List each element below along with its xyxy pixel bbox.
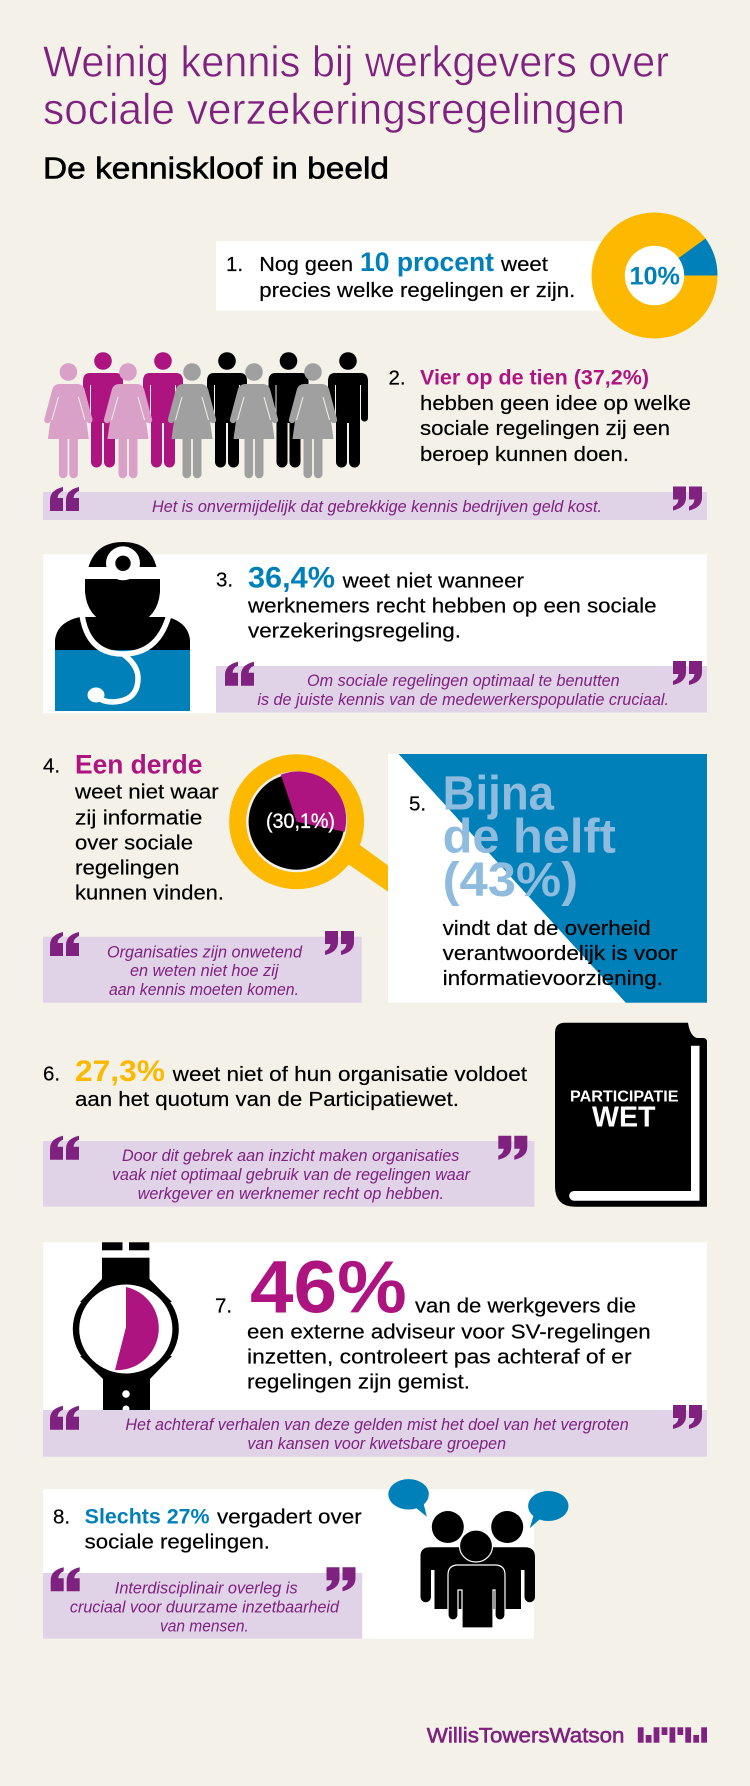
text: item 2: beroep kunnen doen. xyxy=(420,443,629,466)
white background xyxy=(43,1242,707,1410)
icon: opening quote xyxy=(51,1567,80,1591)
text: item 2: Vier op de tien (37,2%) xyxy=(420,366,649,390)
text: item 4: weet niet waar xyxy=(74,780,219,803)
subtitle: De kenniskloof in beeld xyxy=(43,150,389,185)
text: item 2 xyxy=(388,366,691,466)
text: item 6: weet niet of hun organisatie voldoet xyxy=(172,1063,527,1086)
quote text: Interdisciplinair overleg is xyxy=(115,1579,298,1597)
panel: item 2 xyxy=(43,352,707,520)
title: Weinig kennis bij werkgevers over xyxy=(43,38,669,86)
text: item 7: 7. xyxy=(215,1295,232,1318)
icon: book Participatiewet: PARTICIPATIE xyxy=(570,1089,679,1106)
text: item 4: regelingen xyxy=(75,856,179,879)
white text box xyxy=(216,241,606,311)
quote text xyxy=(125,1416,629,1453)
quote text: Het is onvermijdelijk dat gebrekkige kennis bedrijven geld kost. xyxy=(152,498,602,516)
text: item 7: een externe adviseur voor SV-regelingen xyxy=(247,1320,651,1343)
icon: closing quote xyxy=(673,661,702,685)
panel: item 3 xyxy=(43,542,707,713)
icon: opening quote xyxy=(50,1406,79,1430)
quote text xyxy=(257,672,669,709)
donut chart 10 percent: 10% xyxy=(630,262,680,290)
panel: item 7 xyxy=(43,1242,707,1457)
text: item 5: verantwoordelijk is voor xyxy=(443,942,678,965)
icon: magnifying glass with pie: (30,1%) xyxy=(266,810,335,833)
text: item 1: precies welke regelingen er zijn. xyxy=(259,279,575,302)
donut chart 10 percent xyxy=(592,212,718,338)
icon: closing quote xyxy=(673,1405,702,1429)
text: item 5: Bijna xyxy=(443,767,554,820)
icon: opening quote xyxy=(50,932,79,956)
quote text: Het achteraf verhalen van deze gelden mist het doel van het vergroten xyxy=(125,1416,629,1434)
text: item 2: 2. xyxy=(388,366,406,390)
quote text: Door dit gebrek aan inzicht maken organisaties xyxy=(122,1147,459,1165)
text: item 6: 6. xyxy=(43,1063,60,1086)
text: item 4: zij informatie xyxy=(75,806,202,829)
text: item 4: 4. xyxy=(43,755,60,778)
text: item 3 xyxy=(216,562,656,643)
quote text: en weten niet hoe zij xyxy=(130,962,280,980)
text: item 2: sociale regelingen zij een xyxy=(420,417,670,440)
text: item 5: (43%) xyxy=(443,854,578,907)
text: item 7: 46% xyxy=(250,1246,407,1329)
icon: watch with pie xyxy=(73,1242,179,1412)
text: item 3: 36,4% xyxy=(248,562,335,595)
text: item 5 xyxy=(409,767,678,990)
icon: book Participatiewet: WET xyxy=(592,1102,656,1134)
white background xyxy=(388,754,707,1003)
text: item 3: verzekeringsregeling. xyxy=(248,620,461,643)
text: item 8: vergadert over xyxy=(217,1505,362,1528)
text: item 6 xyxy=(43,1055,527,1111)
text: item 5: 5. xyxy=(409,793,426,816)
text: item 8: sociale regelingen. xyxy=(85,1531,270,1554)
quote bar: item 7 xyxy=(43,1405,707,1457)
text: item 7: van de werkgevers die xyxy=(415,1295,636,1318)
text: item 1: weet xyxy=(500,253,548,276)
text: item 4: kunnen vinden. xyxy=(75,881,224,904)
text: item 1: Nog geen xyxy=(259,253,353,276)
quote text xyxy=(70,1579,340,1635)
text: item 1: 1. xyxy=(226,253,243,276)
title xyxy=(43,38,669,134)
text: item 7: regelingen zijn gemist. xyxy=(247,1370,470,1393)
white background xyxy=(43,554,707,713)
panel: item 1 xyxy=(216,212,718,338)
text: item 5: de helft xyxy=(443,811,616,864)
panel: item 6 xyxy=(43,1023,707,1207)
icon: doctor with stethoscope xyxy=(55,542,190,711)
text: item 3: werknemers recht hebben op een sociale xyxy=(247,595,656,618)
text: item 8: 8. xyxy=(53,1505,70,1528)
icon: people talking with speech bubbles xyxy=(388,1479,568,1628)
text: item 1 xyxy=(226,247,575,302)
text: item 4: over sociale xyxy=(75,831,193,854)
text: item 1: 10 procent xyxy=(360,247,494,277)
quote text: is de juiste kennis van de medewerkerspopulatie cruciaal. xyxy=(257,691,669,709)
quote bar: item 4 xyxy=(43,931,362,1003)
text: item 7: inzetten, controleert pas achteraf of er xyxy=(247,1345,632,1368)
quote bar: item 8 xyxy=(43,1567,362,1639)
icon: closing quote xyxy=(325,931,354,955)
text: item 2: hebben geen idee op welke xyxy=(420,392,691,415)
panel: item 4 xyxy=(43,749,390,1003)
icon: closing quote xyxy=(498,1136,527,1160)
panel: item 8 xyxy=(43,1479,568,1639)
icon: opening quote xyxy=(50,1136,79,1160)
text: item 5: informatievoorziening. xyxy=(443,967,663,990)
quote text: cruciaal voor duurzame inzetbaarheid xyxy=(70,1598,340,1616)
icon: closing quote xyxy=(326,1567,356,1591)
text: item 6: 27,3% xyxy=(75,1055,165,1088)
icon: group of men and women xyxy=(44,352,368,478)
quote text: werkgever en werknemer recht op hebben. xyxy=(138,1185,444,1203)
quote text: Om sociale regelingen optimaal te benutten xyxy=(307,672,620,690)
text: item 7 xyxy=(215,1246,651,1393)
quote text: vaak niet optimaal gebruik van de regelingen waar xyxy=(112,1166,471,1184)
icon: magnifying glass with pie xyxy=(229,754,390,893)
text: item 8 xyxy=(53,1505,362,1554)
quote text: Organisaties zijn onwetend xyxy=(107,943,303,961)
text: item 6: aan het quotum van de Participatiewet. xyxy=(75,1088,459,1111)
panel: item 5 xyxy=(388,754,707,1003)
logo: Willis Towers Watson: WillisTowersWatson xyxy=(427,1723,624,1747)
quote bar: item 3 xyxy=(216,661,707,713)
blue diagonal xyxy=(399,754,707,1003)
text: item 3: weet niet wanneer xyxy=(342,570,524,593)
text: item 4: Een derde xyxy=(75,749,202,779)
text: item 4 xyxy=(43,749,224,904)
white background xyxy=(43,1489,534,1639)
quote bar: item 2 xyxy=(43,486,707,520)
text: item 5: vindt dat de overheid xyxy=(443,917,651,940)
quote text xyxy=(107,943,303,999)
icon: book Participatiewet xyxy=(555,1023,707,1207)
text: item 8: Slechts 27% xyxy=(85,1505,210,1528)
icon: opening quote xyxy=(50,487,79,511)
quote text xyxy=(112,1147,471,1203)
quote bar: item 6 xyxy=(43,1136,534,1207)
logo: Willis Towers Watson xyxy=(427,1723,707,1747)
text: item 3: 3. xyxy=(216,568,233,592)
icon: closing quote xyxy=(673,486,702,510)
quote text: van kansen voor kwetsbare groepen xyxy=(247,1435,506,1453)
quote text: aan kennis moeten komen. xyxy=(109,981,299,999)
icon: opening quote xyxy=(225,662,254,686)
title: sociale verzekeringsregelingen xyxy=(43,86,625,134)
quote text: van mensen. xyxy=(160,1617,249,1635)
